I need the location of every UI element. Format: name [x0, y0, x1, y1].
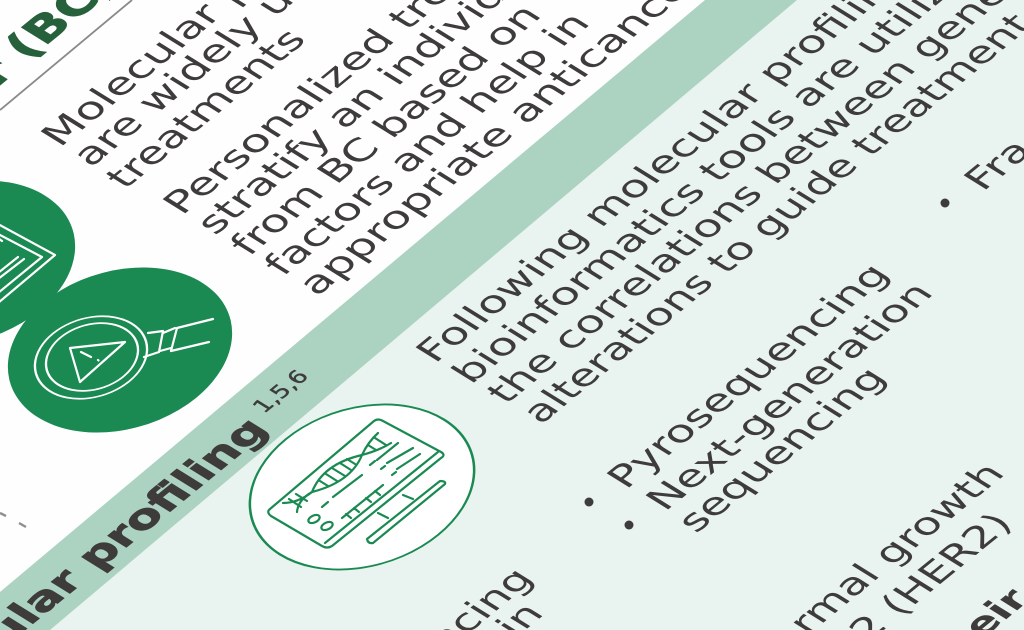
bullet list: sequencing methods: Pyrosequencing [598, 257, 899, 495]
text block: molecular profiling use: treatments [97, 23, 315, 195]
icon: DNA sequencing report [204, 372, 520, 602]
section heading band [0, 0, 797, 630]
bullet list: sequencing methods: sequencing [668, 361, 896, 539]
icon: magnifier with warning triangle in green circle [0, 235, 278, 465]
text block: personalized treatment: factors and help in [255, 6, 599, 282]
heading rule [0, 0, 132, 110]
text block: personalized treatment: from BC based on [221, 0, 551, 262]
reference superscript: 1,5,6 [248, 366, 315, 417]
icon: layered chevrons in green circle [0, 148, 121, 378]
dashed divider [0, 513, 26, 527]
heading: breast cancer (BC) [0, 0, 128, 195]
bullet list: sequencing methods: Next-generation [637, 276, 942, 517]
